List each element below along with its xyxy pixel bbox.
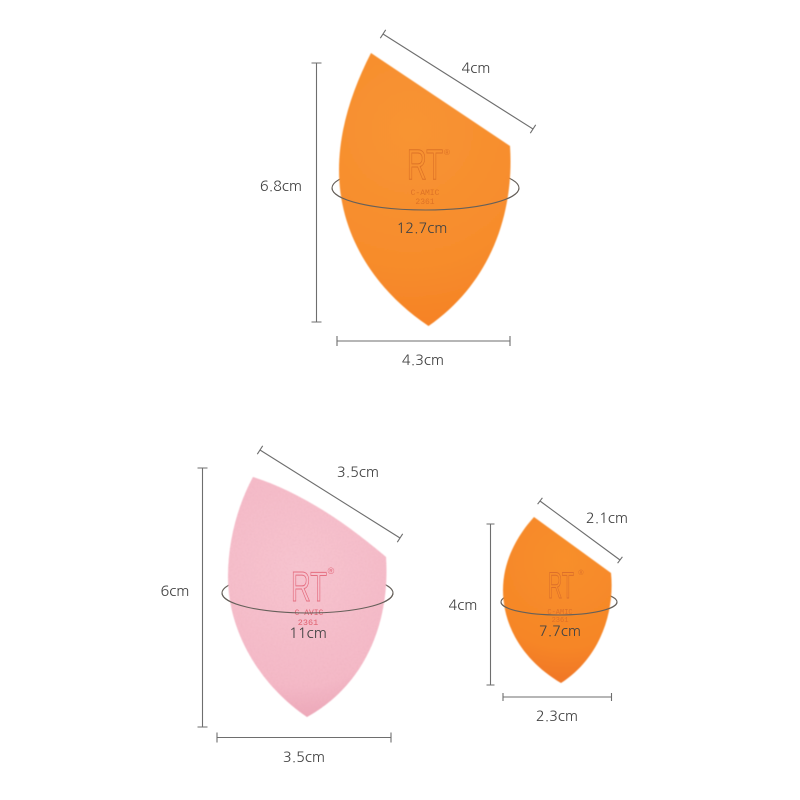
- pink sponge logo: [291, 563, 335, 628]
- pink sponge logo: RT: [291, 563, 327, 610]
- pink sponge logo: ®: [328, 566, 335, 576]
- large sponge top edge dimension: [380, 30, 536, 133]
- label: 12.7cm: 12.7cm: [397, 222, 447, 236]
- large sponge logo: C-AMIC: [411, 189, 440, 198]
- small sponge top edge dimension: [538, 498, 622, 563]
- small sponge logo: [547, 565, 584, 625]
- small sponge width dimension: [503, 693, 612, 701]
- large sponge logo: RT: [407, 141, 443, 189]
- small sponge logo: 2361: [552, 617, 568, 625]
- pink sponge width dimension: [217, 732, 391, 742]
- small orange sponge: [501, 517, 617, 683]
- pink sponge circumference front arc: [222, 593, 393, 613]
- large sponge circumference front arc: [332, 188, 519, 210]
- label: 3.5cm top: 3.5cm: [337, 466, 379, 480]
- label: 2.3cm: 2.3cm: [536, 710, 578, 724]
- large sponge logo: [407, 141, 450, 207]
- large sponge logo: ®: [444, 148, 450, 157]
- large sponge width dimension: [337, 336, 510, 346]
- pink sponge logo: C-AVIC: [295, 609, 324, 618]
- pink sponge height dimension: [198, 468, 208, 727]
- pink sponge top edge dimension: [257, 446, 403, 542]
- label: 2.1cm: 2.1cm: [586, 512, 628, 526]
- label: 6.8cm: 6.8cm: [260, 180, 302, 194]
- small sponge logo: RT: [548, 565, 574, 606]
- pink sponge: [222, 477, 393, 717]
- label: 4.3cm: 4.3cm: [402, 354, 444, 368]
- label: 11cm: 11cm: [289, 627, 327, 641]
- pink sponge logo: 2361: [298, 618, 318, 628]
- label: 7.7cm: 7.7cm: [539, 625, 581, 639]
- small sponge logo: C-AMIC: [547, 609, 573, 617]
- label: 4cm: 4cm: [462, 62, 490, 76]
- small sponge logo: ®: [578, 569, 584, 577]
- label: 6cm: 6cm: [161, 585, 189, 599]
- label: 4cm small: 4cm: [449, 599, 477, 613]
- label: 3.5cm bottom: 3.5cm: [283, 751, 325, 765]
- small sponge height dimension: [486, 524, 494, 685]
- large orange sponge: [332, 53, 519, 326]
- small sponge circumference front arc: [501, 602, 617, 615]
- large sponge logo: 2361: [415, 198, 435, 207]
- large sponge height dimension: [312, 63, 322, 322]
